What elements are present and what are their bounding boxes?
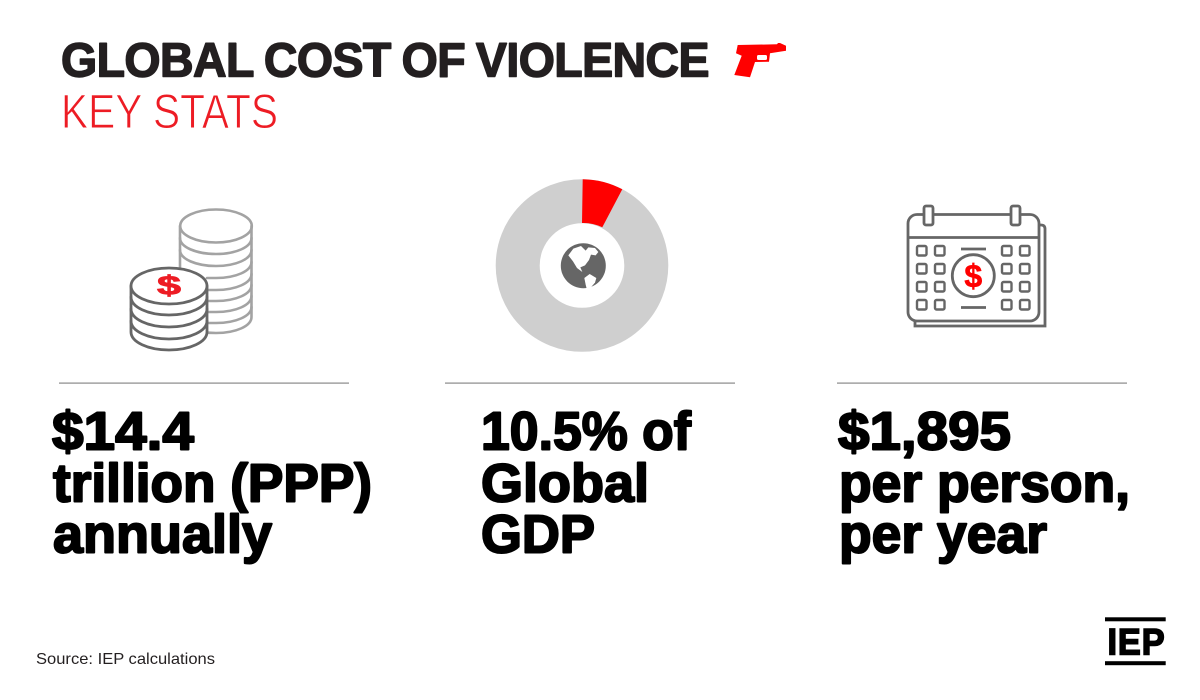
donut red segment [582, 179, 622, 227]
title: GLOBAL COST OF VIOLENCE [61, 34, 709, 88]
stat: annual cost: annually [53, 504, 272, 564]
calendar rings [924, 206, 1020, 225]
front coin stack [131, 268, 207, 350]
source note: Source: IEP calculations [36, 651, 215, 668]
icon: calendar [908, 206, 1045, 326]
icon: globe [561, 243, 610, 290]
stat: per person: per person, [839, 454, 1130, 514]
divider: column 2 [445, 382, 735, 384]
stat: share of GDP: GDP [481, 504, 595, 564]
subtitle: KEY STATS [61, 86, 278, 139]
stat: annual cost: trillion (PPP) [53, 454, 372, 514]
stat: share of GDP: Global [481, 454, 649, 514]
stat: per person: per year [839, 504, 1047, 564]
back coin stack [180, 210, 252, 333]
divider: column 1 [59, 382, 349, 384]
calendar front page [908, 214, 1039, 321]
calendar back page [915, 225, 1045, 326]
logo: IEP: IEP [1108, 620, 1166, 662]
icon: coin stacks [131, 210, 252, 350]
icon: red handgun [734, 43, 786, 77]
calendar day squares [917, 246, 1030, 310]
stat: per person: $1,895 [838, 402, 1011, 462]
stat: share of GDP [481, 402, 692, 564]
donut chart [518, 179, 646, 330]
stat: share of GDP: 10.5% of [481, 402, 692, 462]
icon: dollar on calendar: $ [964, 258, 982, 294]
divider: column 3 [837, 382, 1127, 384]
icon: dollar on coin: $ [157, 270, 181, 300]
stat: annual cost: $14.4 [52, 402, 194, 462]
stat: per person [838, 402, 1130, 564]
stat: annual cost [52, 402, 372, 564]
